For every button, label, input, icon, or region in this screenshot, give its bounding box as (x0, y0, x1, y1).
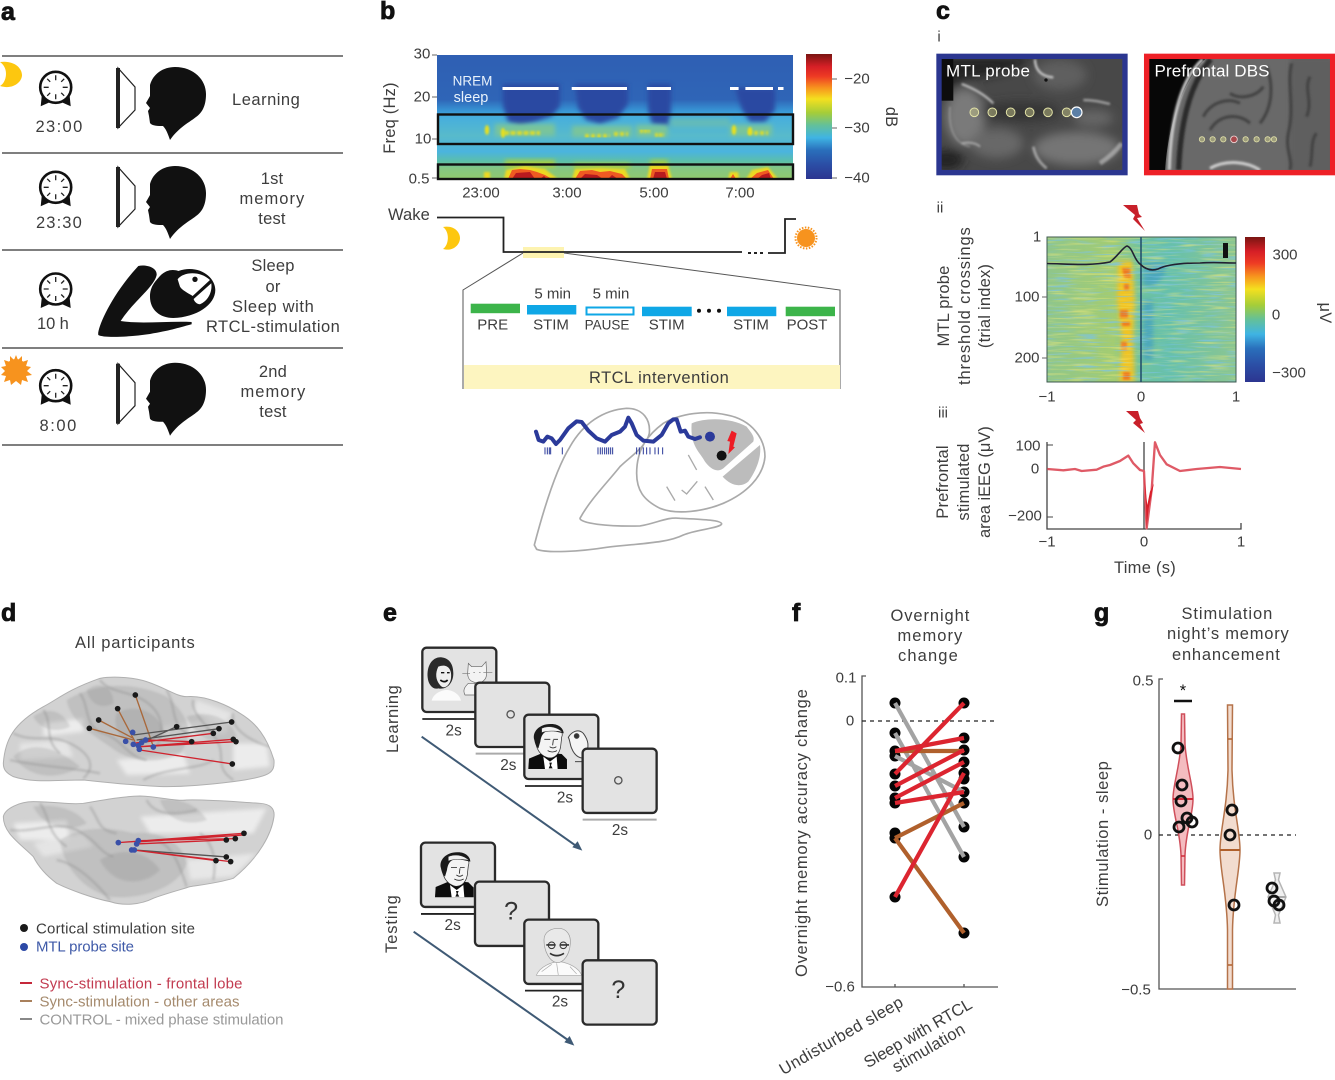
step label: or (265, 278, 281, 296)
electrode contacts (970, 108, 1071, 117)
chart title: enhancement (1172, 646, 1280, 664)
iEEG trace chart: 0 (1140, 534, 1148, 550)
probe sites (123, 729, 156, 752)
axes: 0.5 (1133, 672, 1153, 690)
arrow: testing time (414, 932, 574, 1046)
legend: Sync-stimulation - frontal lobe (40, 976, 242, 992)
testing card 2 (475, 882, 549, 946)
significance marker: * (1180, 682, 1187, 700)
learning underline (525, 783, 582, 789)
row labels (383, 685, 402, 953)
panel c: probe locations and responses (930, 0, 1334, 577)
DBS label: Prefrontal DBS (1154, 62, 1270, 80)
iEEG trace chart: Time (s) (1114, 559, 1176, 577)
icon: sleeping person (98, 266, 215, 337)
clock label: 8:00 (40, 417, 76, 435)
intervention band (464, 365, 840, 389)
sub-label iii: iii (938, 404, 948, 422)
neural wave (536, 418, 700, 444)
heatmap x axis: 0 (1137, 388, 1145, 406)
time axis: 23:00 (462, 184, 500, 202)
stimulation sites (213, 830, 247, 864)
clock label: 10 h (37, 315, 69, 333)
icon: sun (1, 355, 32, 385)
duration: 2s (445, 917, 461, 934)
testing card 4 (583, 960, 657, 1025)
NREM label: NREM (453, 74, 492, 88)
heatmap colorbar: μV (1316, 303, 1334, 323)
axes (1121, 672, 1296, 998)
MRI: prefrontal DBS (1147, 56, 1333, 174)
step label: Sleep with (232, 298, 314, 316)
icon: viewer at screen (116, 363, 206, 436)
frequency axis: 10 (415, 130, 431, 148)
panel b: sleep spectrogram and intervention (380, 0, 900, 552)
learning card 1 (422, 648, 496, 712)
sub-label i: i (937, 28, 941, 46)
sleeping brain diagram (534, 408, 765, 552)
frequency axis: Freq (Hz) (381, 82, 399, 154)
panel title: All participants (75, 634, 195, 652)
icon: clock 10 h (40, 274, 71, 308)
panel letter f: f (792, 599, 801, 627)
iEEG trace chart: 100 (1015, 438, 1041, 454)
heatmap y axis: threshold crossings (956, 227, 974, 385)
icon: stimulation bolt (727, 431, 737, 454)
heatmap x axis: −1 (1038, 388, 1056, 406)
STIM block (527, 286, 576, 334)
axes (825, 670, 998, 996)
panel d: brain electrode map (1, 599, 284, 1028)
step label: RTCL-stimulation (206, 318, 340, 336)
duration: 2s (612, 822, 628, 839)
learning underline (583, 817, 657, 823)
row 1: learning (36, 67, 300, 140)
intervention schedule (463, 253, 840, 389)
iEEG trace chart: 1 (1237, 534, 1245, 550)
highlighted epoch (523, 247, 564, 258)
intervention schedule: RTCL intervention (589, 369, 729, 387)
learning card 2 (475, 683, 549, 747)
selected contact (1071, 107, 1082, 118)
stimulation site (717, 451, 727, 461)
panel e: memory task (383, 599, 657, 1046)
legend: Sync-stimulation - other areas (40, 994, 240, 1010)
testing card 3 (524, 920, 598, 984)
violin: control (1268, 873, 1286, 923)
colorbar: dB (882, 107, 900, 127)
duration: 2s (557, 789, 573, 806)
heatmap colorbar: 0 (1272, 306, 1280, 324)
iEEG trace chart: −1 (1038, 534, 1056, 550)
frequency axis (381, 46, 437, 188)
time axis: 7:00 (725, 184, 755, 202)
row 4: second test (40, 363, 306, 436)
testing underline (421, 911, 475, 917)
heatmap y axis: 200 (1014, 350, 1040, 366)
step label: Sleep (251, 257, 295, 275)
heatmap colorbar: 300 (1272, 246, 1298, 264)
heatmap colorbar (1245, 237, 1334, 382)
PAUSE block: 5 min (593, 286, 629, 302)
icon: viewer at screen (116, 67, 206, 140)
control lines (895, 703, 964, 857)
portrait (528, 724, 567, 769)
iEEG y label: stimulated (955, 443, 973, 521)
iEEG y label: Prefrontal (934, 445, 952, 519)
duration: 2s (500, 757, 517, 774)
time axis: 3:00 (552, 184, 582, 202)
clock label: 23:30 (36, 214, 82, 232)
heatmap y axis (935, 227, 1047, 385)
iEEG y label (934, 426, 994, 538)
arrow: learning time (422, 737, 582, 851)
wake sleep hypnogram: Wake (388, 206, 430, 224)
other-area lines (895, 751, 964, 933)
panel g: memory enhancement violins (1094, 599, 1296, 998)
NREM label (453, 74, 492, 106)
panel letter e: e (383, 599, 397, 627)
heatmap of threshold crossings (1047, 237, 1236, 382)
violin: other areas (1220, 705, 1240, 989)
learning card 3 (524, 715, 598, 779)
iEEG y label: area iEEG (μV) (976, 426, 994, 538)
y axis label: Overnight memory accuracy change (793, 689, 811, 977)
average trace (1047, 246, 1236, 270)
heatmap colorbar: −300 (1272, 364, 1306, 382)
x labels (776, 993, 976, 1079)
y axis label: Stimulation - sleep (1094, 761, 1112, 907)
x labels: stimulation (889, 1020, 968, 1076)
panel a: protocol timeline (0, 0, 343, 445)
STIM block: STIM (733, 316, 769, 334)
STIM block (727, 307, 776, 334)
step label (240, 170, 305, 228)
heatmap y axis: 100 (1014, 288, 1040, 306)
chart title: Stimulation (1182, 605, 1272, 623)
sub-label ii: ii (937, 200, 943, 216)
row labels: Testing (383, 895, 401, 953)
portrait (536, 928, 582, 975)
MRI: MTL probe (930, 56, 1125, 173)
testing underline (525, 988, 582, 993)
duration: 2s (552, 993, 568, 1010)
step label: memory (240, 190, 305, 208)
colorbar: −40 (844, 170, 870, 186)
MTL label: MTL probe (946, 62, 1030, 80)
wake sleep hypnogram (388, 206, 816, 258)
scale bar (1223, 243, 1228, 258)
step label: memory (240, 383, 306, 401)
icon: sun (796, 228, 816, 248)
legend: CONTROL - mixed phase stimulation (40, 1012, 284, 1028)
POST block: POST (787, 316, 827, 334)
axes: 0 (1144, 826, 1152, 844)
icon: clock 23:00 (40, 72, 71, 106)
testing card 1 (421, 843, 495, 907)
heatmap x axis (1038, 388, 1240, 406)
time axis (462, 184, 755, 202)
panel f: overnight memory change (776, 599, 998, 1079)
row labels: Learning (384, 685, 402, 753)
step label: 2nd (259, 363, 287, 381)
ellipsis (697, 309, 721, 313)
chart title: memory (898, 627, 963, 645)
STIM block: STIM (649, 316, 685, 334)
brain bottom view (3, 796, 274, 904)
parrot (568, 731, 588, 762)
icon: clock 8:00 (40, 370, 71, 405)
portrait and cat (428, 657, 492, 701)
chart title (890, 607, 970, 665)
axes: −0.5 (1121, 982, 1151, 998)
heatmap y axis: 1 (1033, 228, 1041, 246)
spectrogram (437, 55, 793, 179)
row 3: sleep (37, 257, 340, 337)
learning card 4 (583, 749, 657, 813)
chart title: change (898, 647, 958, 665)
frequency axis: 20 (414, 88, 430, 106)
probe site (705, 432, 715, 442)
participant markers (1173, 743, 1284, 910)
icon: stimulation bolt (1123, 205, 1145, 231)
iEEG trace chart: 0 (1031, 460, 1039, 478)
x labels: Undisturbed sleep (776, 993, 906, 1079)
iEEG trace chart: −200 (1008, 508, 1042, 524)
chart title: night’s memory (1167, 625, 1290, 643)
frequency axis: 0.5 (409, 170, 429, 188)
spike raster (545, 447, 663, 454)
chart title: Overnight (890, 607, 970, 625)
left dots (890, 698, 900, 902)
significance marker (1174, 682, 1192, 701)
testing card 4: ? (611, 976, 625, 1004)
portrait (435, 852, 474, 897)
icon: moon (443, 227, 460, 250)
colorbar (806, 54, 900, 186)
connection lines (118, 833, 244, 862)
probe sites (115, 838, 141, 853)
spindle band box (438, 114, 793, 144)
electrode contacts (1199, 137, 1277, 142)
time axis: 5:00 (639, 184, 669, 202)
x labels: Sleep with RTCL (861, 995, 976, 1072)
delta band box (438, 164, 793, 179)
connection lines (89, 695, 236, 764)
PAUSE block: PAUSE (585, 318, 629, 332)
clock label: 23:00 (36, 118, 82, 136)
colorbar: −30 (844, 120, 870, 136)
NREM sleep bars (502, 87, 784, 90)
right dots (958, 698, 970, 938)
step label: test (258, 210, 286, 228)
icon: stimulation bolt (1126, 411, 1145, 433)
axes: 0 (846, 712, 854, 730)
panel letter d: d (1, 599, 16, 627)
duration: 2s (446, 722, 462, 739)
step label (240, 363, 306, 421)
legend (20, 920, 284, 1028)
step label: 1st (261, 170, 284, 188)
panel letter g: g (1094, 599, 1109, 627)
STIM block: STIM (533, 316, 569, 334)
step label: Learning (232, 91, 300, 109)
stimulation sites (86, 692, 239, 767)
icon: viewer at screen (116, 166, 206, 239)
heatmap y axis: MTL probe (935, 266, 953, 346)
PRE block (471, 304, 520, 334)
STIM block (642, 307, 692, 334)
POST block (786, 307, 835, 334)
legend: MTL probe site (36, 938, 134, 956)
testing card 2: ? (504, 897, 518, 925)
stimulation onset line (1140, 237, 1142, 382)
NREM label: sleep (454, 90, 488, 106)
learning underline (422, 716, 475, 722)
iEEG trace chart (1008, 438, 1245, 577)
PRE block: PRE (477, 316, 508, 334)
step label: test (259, 403, 287, 421)
chart title (1167, 605, 1290, 664)
heatmap x axis: 1 (1232, 388, 1240, 406)
brain top view (3, 677, 274, 787)
step label (206, 257, 340, 336)
violin: frontal (1173, 714, 1193, 885)
learning underline (476, 751, 524, 757)
selected contact (1231, 136, 1237, 143)
frontal lines (895, 703, 964, 897)
row 2: first test (36, 166, 305, 239)
icon: moon (0, 62, 22, 87)
frequency axis: 30 (414, 46, 430, 62)
axes: −0.6 (825, 978, 855, 996)
heatmap y axis: (trial index) (976, 264, 994, 348)
icon: clock 23:30 (40, 172, 71, 206)
axes: 0.1 (836, 670, 856, 686)
PAUSE block (585, 286, 634, 332)
colorbar: −20 (844, 70, 870, 88)
legend: Cortical stimulation site (36, 920, 195, 938)
STIM block: 5 min (534, 286, 571, 302)
